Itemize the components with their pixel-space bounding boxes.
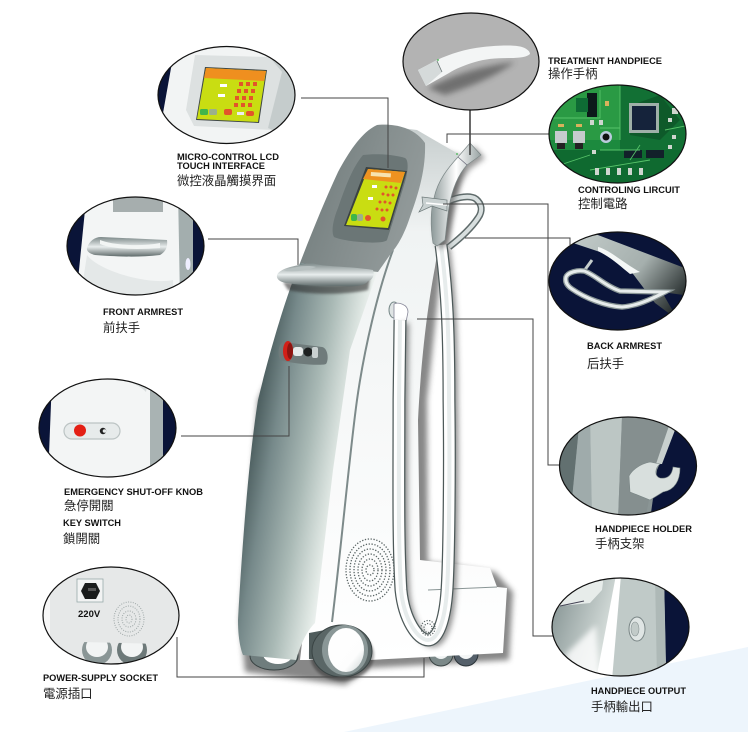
panel: emergency knob [36,377,180,480]
label: front armrest: 前扶手 [103,320,140,335]
panel: treatment handpiece [403,13,539,110]
label: treatment handpiece: 操作手柄 [548,66,598,81]
label: micro-control LCD: 微控液晶觸摸界面 [177,173,276,188]
label: power socket [43,673,158,701]
big front wheel [309,625,374,681]
label: front armrest: FRONT ARMREST [103,307,183,318]
label: controlling circuit [578,185,680,211]
label: front armrest [103,307,183,335]
panel: handpiece output [550,575,695,680]
label: handpiece output: HANDPIECE OUTPUT [591,686,686,697]
label: handpiece holder: 手柄支架 [595,537,645,551]
screen recess [333,154,408,243]
label: handpiece holder: HANDPIECE HOLDER [595,524,692,535]
label: controlling circuit: 控制電路 [578,196,628,211]
speaker grille [346,539,394,601]
label: handpiece holder [595,524,692,551]
label: treatment handpiece [548,56,663,81]
label: treatment handpiece: TREATMENT HANDPIECE [548,56,663,67]
label: micro-control LCD: TOUCH INTERFACE [177,161,266,172]
label: power socket: 電源插口 [43,686,93,701]
label: emergency and key switch: 急停開關 [64,498,114,513]
background: pale blue corner [344,647,748,732]
emergency knob and key switch [279,341,328,365]
label: power socket: POWER-SUPPLY SOCKET [43,673,158,684]
back armrest loop [449,197,481,247]
panel: front armrest [66,196,205,296]
panel: power socket: 220V [78,609,101,620]
label: micro-control LCD [177,152,279,188]
panel: power socket [40,567,180,665]
small speaker inside cable loop [421,620,435,636]
label: back armrest: 后扶手 [587,356,624,371]
base lip line [428,587,497,590]
rear wheels [250,642,478,670]
panel: circuit board [549,85,690,185]
front panel upper [300,125,425,272]
front panel lower [238,263,378,660]
panel: LCD touch interface [150,40,296,144]
label: handpiece output [591,686,686,714]
treatment handpiece [431,143,485,249]
label: controlling circuit: CONTROLING LIRCUIT [578,185,680,196]
front armrest [277,263,374,294]
label: micro-control LCD: MICRO-CONTROL LCD [177,152,279,163]
label: back armrest [587,341,662,371]
machine illustration [238,125,513,685]
panel: back armrest [549,232,690,330]
label: emergency and key switch: KEY SWITCH [63,518,121,529]
label: emergency and key switch: 鎖開關 [63,531,100,546]
machine body side [300,125,507,660]
output connector [389,302,408,322]
output cable [399,245,454,643]
machine shadow [240,128,513,685]
label: emergency and key switch [63,487,203,546]
LCD screen [344,167,407,230]
label: emergency and key switch: EMERGENCY SHUT-OFF KNOB [64,487,203,498]
label: handpiece output: 手柄輸出口 [591,699,653,714]
label: back armrest: BACK ARMREST [587,341,662,352]
handpiece holder [419,197,447,212]
leader lines [177,98,570,677]
white strip edge line [332,250,393,622]
panel: handpiece holder [555,417,700,520]
